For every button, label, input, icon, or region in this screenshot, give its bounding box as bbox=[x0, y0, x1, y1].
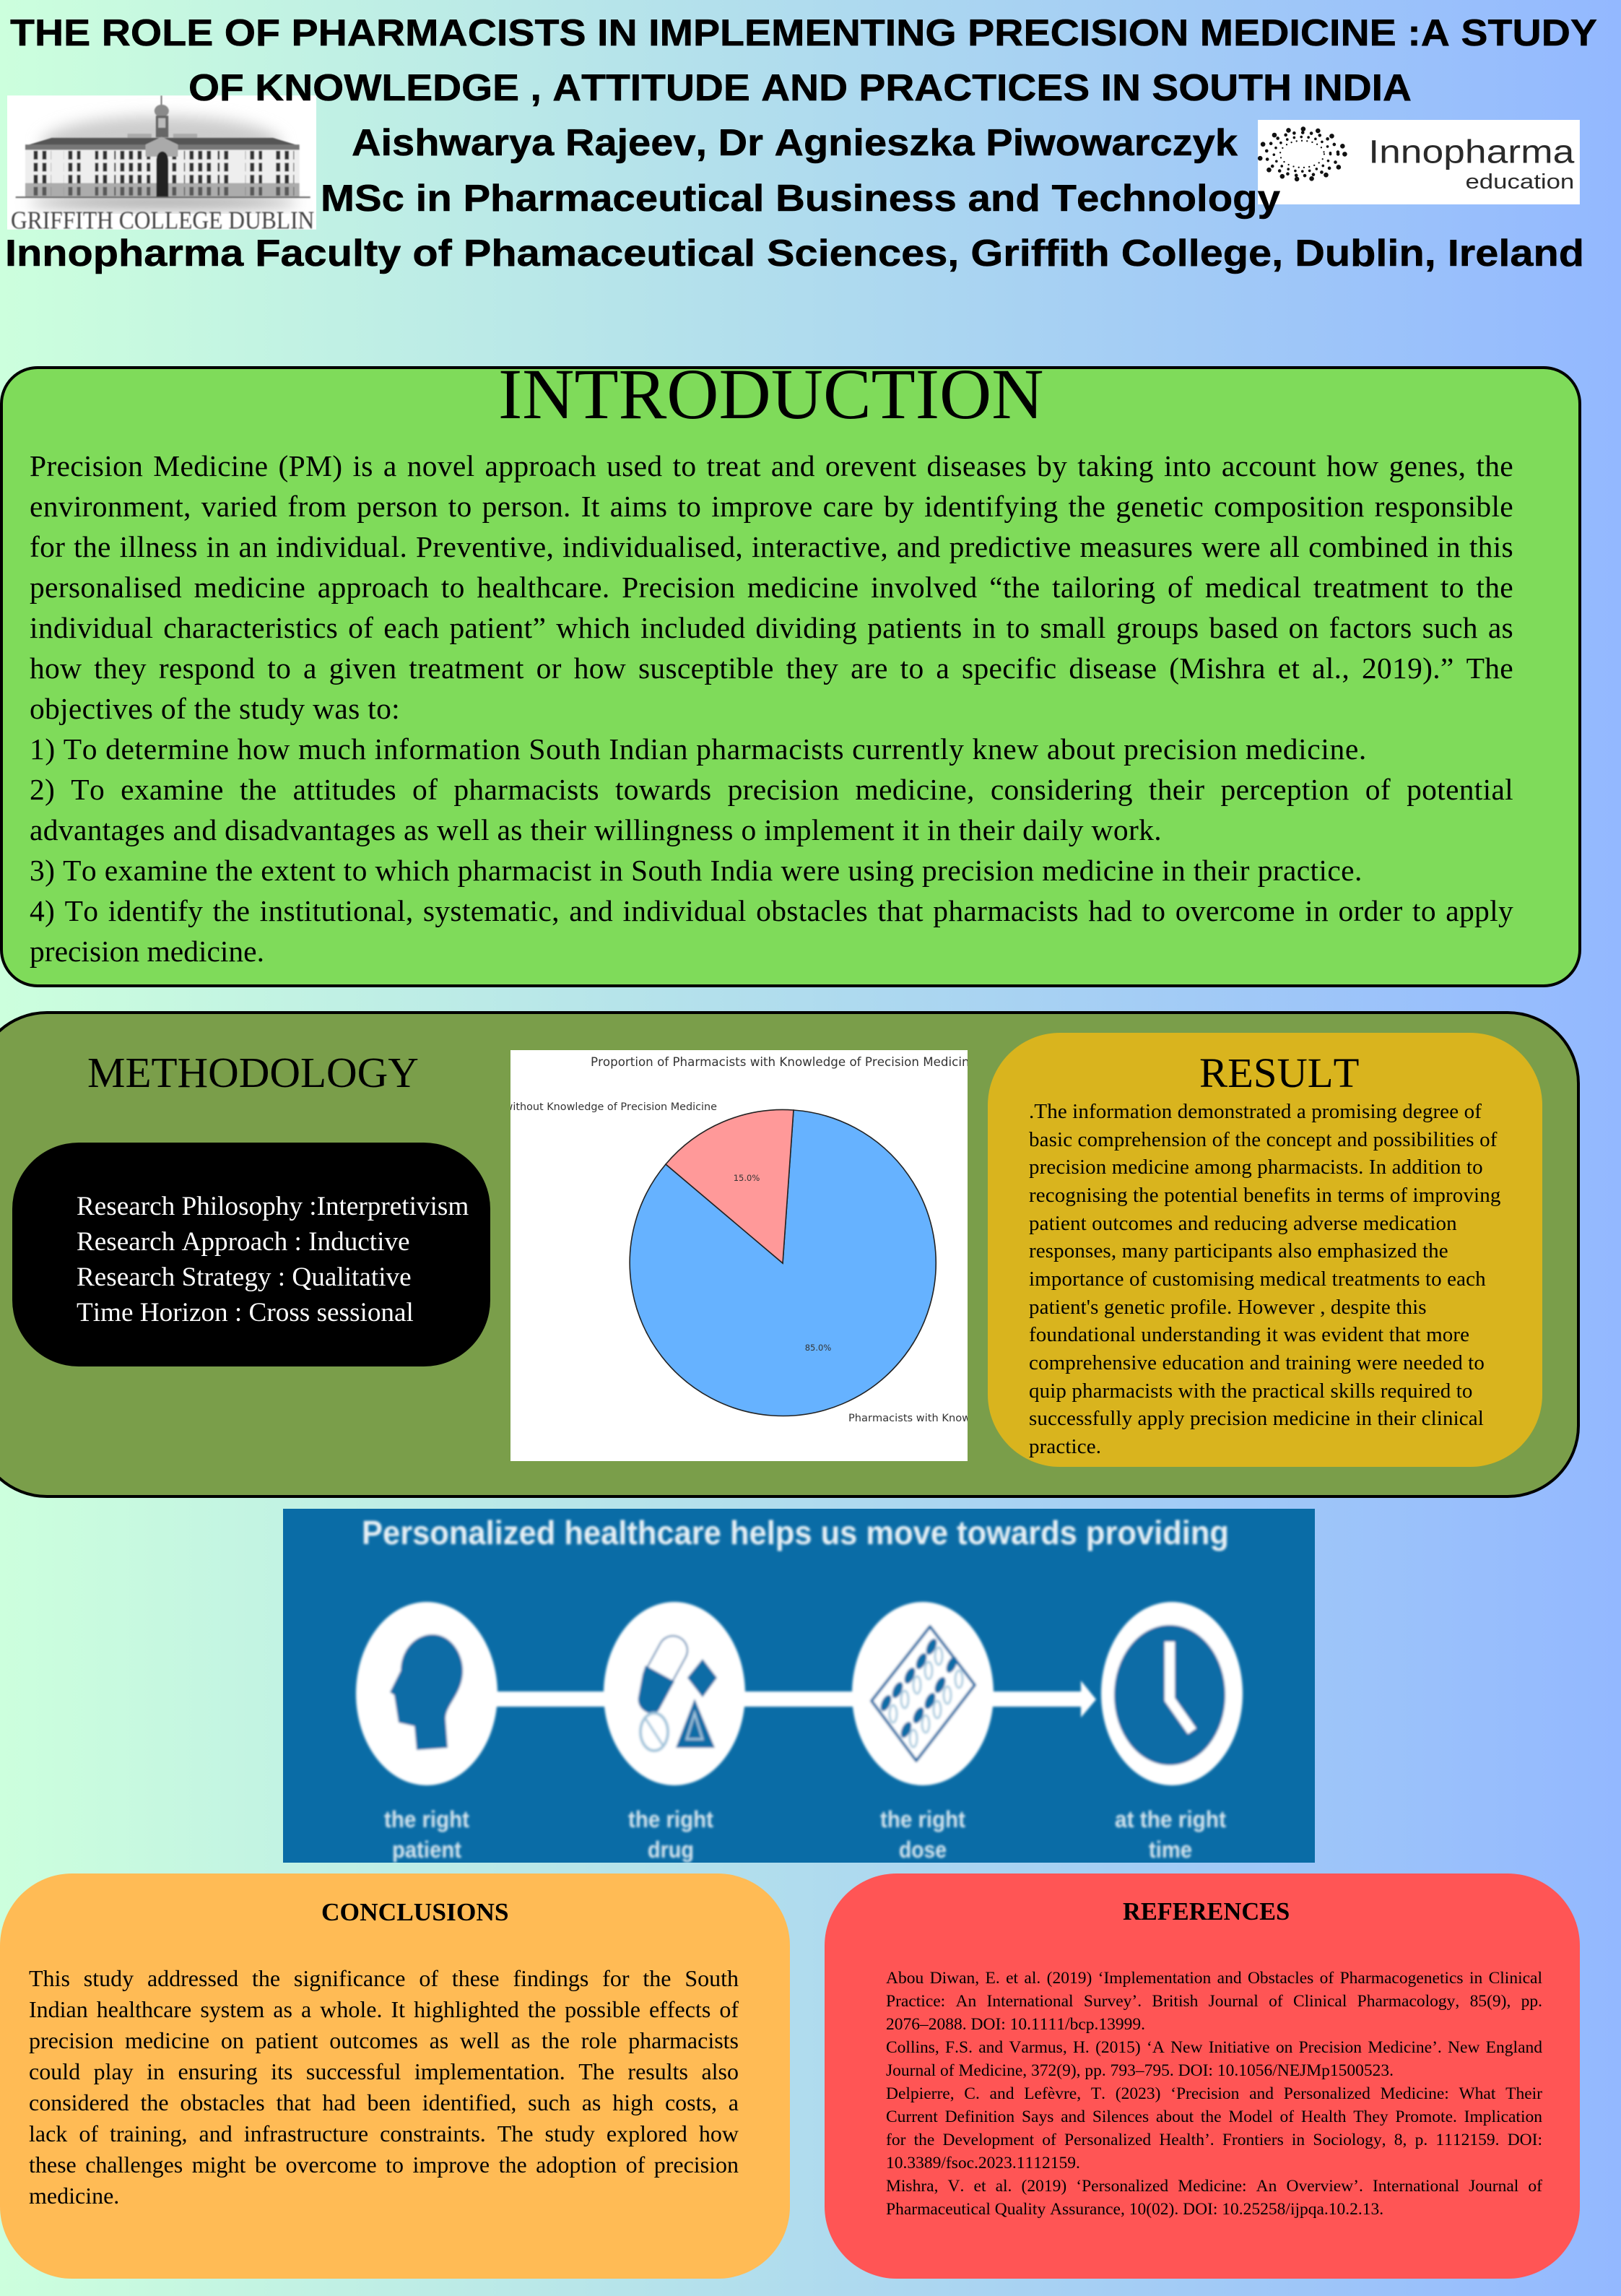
text: research design list: Research Philosophy :Interpretivism bbox=[77, 1192, 469, 1221]
heading: methodology: METHODOLOGY bbox=[87, 1049, 419, 1096]
panel: methodology and result bbox=[0, 1011, 1580, 1498]
labels: right patient, drug, dose, time: at the right bbox=[1115, 1806, 1226, 1832]
text: reference list: Mishra, V. et al. (2019) ‘Personalized Medicine: An Overview’. International Journal of bbox=[886, 2177, 1542, 2196]
value: 85.0%: 85.0% bbox=[805, 1343, 831, 1353]
text: introduction body bbox=[30, 449, 1513, 968]
text: result body: .The information demonstrated a promising degree of bbox=[1029, 1100, 1482, 1123]
text: conclusions body: these challenges might be overcome to improve the adoption of precision bbox=[29, 2152, 739, 2178]
icon: patient head bbox=[356, 1602, 497, 1785]
text: conclusions body: This study addressed the significance of these findings for the South bbox=[29, 1965, 739, 1991]
text: result body bbox=[1029, 1100, 1500, 1458]
panel: references bbox=[825, 1873, 1580, 2279]
heading: result: RESULT bbox=[1199, 1049, 1359, 1096]
chart title: Proportion of Pharmacists with Knowledge of Precision Medicine bbox=[591, 1054, 968, 1069]
authors: Aishwarya Rajeev, Dr Agnieszka Piwowarczyk bbox=[352, 122, 1238, 164]
panel: introduction bbox=[0, 366, 1581, 987]
text: reference list: Practice: An International Survey’. British Journal of Clinical Pharmacology, 85(9), pp. bbox=[886, 1992, 1542, 2011]
text: introduction body: Precision Medicine (PM) is a novel approach used to treat and orevent diseases by taking into account how genes, the bbox=[30, 449, 1513, 482]
title: OF KNOWLEDGE , ATTITUDE AND PRACTICES IN SOUTH INDIA bbox=[188, 67, 1412, 109]
text: conclusions body: lack of training, and infrastructure constraints. The study explored how bbox=[29, 2120, 739, 2146]
text: introduction body: precision medicine. bbox=[30, 935, 264, 968]
text: introduction body: 4) To identify the institutional, systematic, and individual obstacles that pharmacists had to overcome in order to apply bbox=[30, 894, 1513, 927]
text: reference list: Current Definition Says and Silences about the Model of Health They Promote. Implication bbox=[886, 2107, 1542, 2126]
text: result body: basic comprehension of the concept and possibilities of bbox=[1029, 1128, 1497, 1151]
panel: conclusions bbox=[0, 1873, 790, 2279]
text: research design list: Research Approach : Inductive bbox=[77, 1227, 410, 1257]
text: research design list: Time Horizon : Cross sessional bbox=[77, 1298, 414, 1327]
text: conclusions body: Indian healthcare system as a whole. It highlighted the possible effects of bbox=[29, 1996, 739, 2022]
text: conclusions body: could play in ensuring its successful implementation. The results also bbox=[29, 2058, 739, 2084]
text: reference list bbox=[886, 1969, 1542, 2219]
title: THE ROLE OF PHARMACISTS IN IMPLEMENTING PRECISION MEDICINE :A STUDY bbox=[10, 12, 1597, 54]
heading: conclusions: CONCLUSIONS bbox=[321, 1897, 509, 1926]
panel: result bbox=[988, 1033, 1542, 1467]
text: introduction body: how they respond to a given treatment or how susceptible they are to a specific disease (Mishra et al., 2019).” The bbox=[30, 651, 1513, 685]
panel: research design bbox=[12, 1143, 490, 1366]
text: result body: responses, many participants also emphasized the bbox=[1029, 1239, 1448, 1262]
text: result body: comprehensive education and training were needed to bbox=[1029, 1351, 1485, 1374]
text: introduction body: for the illness in an individual. Preventive, individualised, interactive, and predictive measures were all combined in this bbox=[30, 530, 1513, 563]
text: research design list bbox=[77, 1192, 469, 1327]
text: conclusions body: precision medicine on patient outcomes as well as the role pharmacists bbox=[29, 2027, 739, 2053]
text: reference list: 10.3389/fsoc.2023.1112159. bbox=[886, 2154, 1080, 2172]
text: result body: practice. bbox=[1029, 1435, 1101, 1458]
text: introduction body: objectives of the study was to: bbox=[30, 692, 400, 725]
text: introduction body: 3) To examine the extent to which pharmacist in South India were using precision medicine in their practice. bbox=[30, 854, 1363, 887]
labels: right patient, drug, dose, time: drug bbox=[648, 1837, 694, 1863]
heading: references: REFERENCES bbox=[1123, 1898, 1290, 1925]
labels: right patient, drug, dose, time: the right bbox=[628, 1806, 713, 1832]
icon: clock bbox=[1101, 1602, 1243, 1785]
title bbox=[10, 12, 1597, 109]
text: reference list: Collins, F.S. and Varmus, H. (2015) ‘A New Initiative on Precision Medicine’. New England bbox=[886, 2038, 1542, 2057]
text: reference list: 2076–2088. DOI: 10.1111/bcp.13999. bbox=[886, 2015, 1145, 2034]
affiliation: Innopharma Faculty of Phamaceutical Sciences, Griffith College, Dublin, Ireland bbox=[5, 233, 1584, 274]
text: introduction body: environment, varied from person to person. It aims to improve care by identifying the genetic composition responsible bbox=[30, 490, 1513, 523]
text: introduction body: advantages and disadvantages as well as their willingness o implement it in their daily work. bbox=[30, 813, 1162, 846]
value: 15.0%: 15.0% bbox=[734, 1173, 760, 1183]
text: result body: importance of customising medical treatments to each bbox=[1029, 1268, 1486, 1291]
text: result body: foundational understanding it was evident that more bbox=[1029, 1323, 1469, 1346]
text: result body: patient's genetic profile. However , despite this bbox=[1029, 1296, 1427, 1319]
text: reference list: Abou Diwan, E. et al. (2019) ‘Implementation and Obstacles of Pharmacogenetics in Clinical bbox=[886, 1969, 1542, 1988]
labels: right patient, drug, dose, time bbox=[384, 1806, 1226, 1863]
text: research design list: Research Strategy : Qualitative bbox=[77, 1262, 412, 1292]
slice: with knowledge 85% bbox=[630, 1110, 936, 1416]
labels: right patient, drug, dose, time: dose bbox=[899, 1837, 947, 1863]
header text bbox=[5, 12, 1597, 274]
panel: personalized healthcare graphic bbox=[283, 1509, 1315, 1863]
text: result body: recognising the potential benefits in terms of improving bbox=[1029, 1184, 1500, 1207]
text: reference list: Pharmaceutical Quality Assurance, 10(02). DOI: 10.25258/ijpqa.10.2.13. bbox=[886, 2200, 1383, 2219]
graphic heading: Personalized healthcare helps us move towards providing bbox=[362, 1514, 1229, 1551]
text: conclusions body bbox=[29, 1965, 739, 2209]
logo: Innopharma Education: education bbox=[1465, 170, 1574, 194]
text: reference list: for the Development of Personalized Health’. Frontiers in Sociology, 8, p. 1112159. DOI: bbox=[886, 2131, 1542, 2149]
labels: right patient, drug, dose, time: time bbox=[1149, 1837, 1192, 1863]
arrow: connecting line bbox=[491, 1681, 1096, 1717]
degree programme: MSc in Pharmaceutical Business and Technology bbox=[321, 178, 1280, 220]
icon: blister pack dose bbox=[852, 1602, 994, 1785]
text: introduction body: 1) To determine how much information South Indian pharmacists currently knew about precision medicine. bbox=[30, 732, 1367, 766]
text: reference list: Journal of Medicine, 372(9), pp. 793–795. DOI: 10.1056/NEJMp1500523. bbox=[886, 2061, 1394, 2080]
text: introduction body: personalised medicine approach to healthcare. Precision medicine involved “the tailoring of medical treatment to the bbox=[30, 571, 1513, 604]
text: reference list: Delpierre, C. and Lefèvre, T. (2023) ‘Precision and Personalized Medicine: What Their bbox=[886, 2084, 1542, 2103]
text: conclusions body: medicine. bbox=[29, 2183, 119, 2209]
text: conclusions body: considered the obstacles that had been identified, such as high costs, a bbox=[29, 2089, 739, 2115]
text: introduction body: individual characteristics of each patient” which included dividing patients in to small groups based on factors such as bbox=[30, 611, 1513, 644]
text: result body: patient outcomes and reducing adverse medication bbox=[1029, 1212, 1457, 1235]
logo: Innopharma Education: Innopharma bbox=[1368, 134, 1575, 170]
slice: without knowledge 15% bbox=[666, 1109, 794, 1263]
labels: right patient, drug, dose, time: patient bbox=[392, 1837, 461, 1863]
text: introduction body: 2) To examine the attitudes of pharmacists towards precision medicine, considering their perception of potential bbox=[30, 773, 1513, 806]
text: result body: successfully apply precision medicine in their clinical bbox=[1029, 1407, 1484, 1430]
labels: right patient, drug, dose, time: the right bbox=[384, 1806, 469, 1832]
logo: Griffith College Dublin bbox=[7, 95, 316, 230]
labels: right patient, drug, dose, time: the right bbox=[880, 1806, 965, 1832]
text: result body: precision medicine among pharmacists. In addition to bbox=[1029, 1156, 1483, 1179]
heading: introduction: INTRODUCTION bbox=[498, 354, 1043, 434]
icon: drugs bbox=[604, 1602, 745, 1785]
text: result body: quip pharmacists with the practical skills required to bbox=[1029, 1379, 1473, 1403]
logo: Innopharma Education bbox=[1258, 120, 1580, 204]
chart: pie of pharmacists' knowledge bbox=[510, 1050, 968, 1461]
